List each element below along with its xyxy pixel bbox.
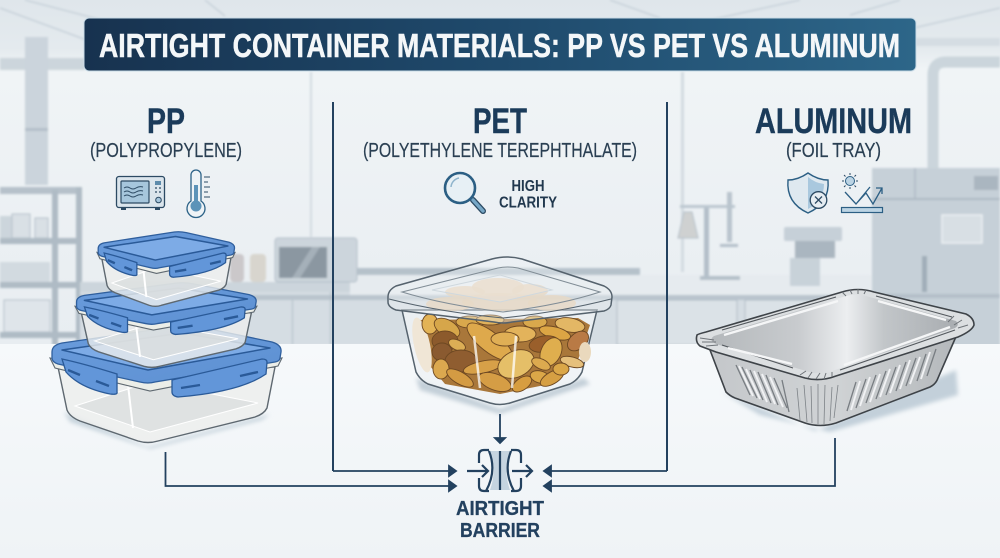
label: airtight barrier: AIRTIGHT <box>456 497 544 520</box>
label: high clarity <box>499 178 558 212</box>
icon: shield with cross <box>788 173 828 213</box>
icon: airtight barrier <box>467 450 532 491</box>
subheading: polyethylene terephthalate: (POLYETHYLENE TEREPHTHALATE) <box>363 140 637 162</box>
background: white table surface <box>0 344 1000 558</box>
icon: microwave <box>116 176 164 210</box>
icon: magnifier <box>445 173 483 211</box>
label: high clarity: HIGH <box>512 178 544 195</box>
panel: PP <box>50 102 282 449</box>
illustration: foil tray <box>696 289 974 432</box>
subheading: foil tray: (FOIL TRAY) <box>786 140 881 162</box>
arrows into airtight barrier <box>166 414 835 491</box>
transparent lid <box>388 257 612 323</box>
divider: right <box>666 102 668 471</box>
large container <box>50 326 282 442</box>
illustration: stacked PP containers <box>50 232 282 449</box>
title banner <box>84 18 916 71</box>
icon: reflective surface <box>842 173 882 212</box>
label: airtight barrier <box>456 497 544 542</box>
illustration: PET container with nuts <box>388 257 612 414</box>
heading: aluminum: ALUMINUM <box>755 102 912 141</box>
nuts <box>408 314 592 395</box>
small container <box>97 232 235 306</box>
nut mass backdrop <box>418 318 590 394</box>
subheading: polypropylene: (POLYPROPYLENE) <box>90 140 242 162</box>
heading: PET: PET <box>473 102 527 141</box>
label: high clarity: CLARITY <box>499 194 558 212</box>
icon: thermometer <box>187 170 210 217</box>
heading: PP: PP <box>147 102 185 141</box>
nuts seen through lid <box>426 278 576 311</box>
panel: PET <box>363 102 637 414</box>
background: blurred laboratory <box>0 0 1000 348</box>
divider: left <box>332 102 334 471</box>
panel: aluminum <box>696 102 974 432</box>
label: airtight barrier: BARRIER <box>460 519 540 542</box>
medium container <box>75 283 257 367</box>
